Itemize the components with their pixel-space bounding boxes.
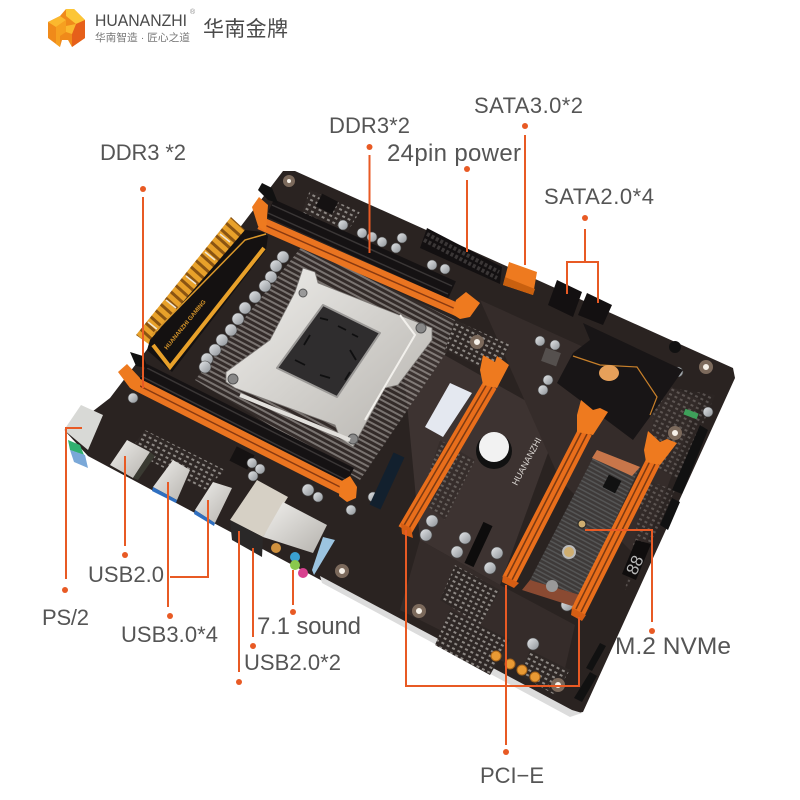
upper DDR3 slots <box>252 183 480 319</box>
icon: orange cube logo <box>48 9 85 47</box>
brand name Chinese: 华南金牌 <box>203 18 288 41</box>
pointer <box>366 144 372 253</box>
digit display: 88 <box>622 553 648 578</box>
audio block <box>263 502 335 578</box>
pointer <box>522 123 528 265</box>
CPU socket <box>226 268 432 447</box>
chipset heatsink <box>557 323 683 440</box>
annotation: USB2.0 dual <box>236 531 341 685</box>
annotation: DDR3 upper <box>329 113 410 253</box>
USB 3.0 port B <box>194 482 232 526</box>
USB 2.0 port <box>110 440 155 480</box>
PS/2 port <box>64 405 103 468</box>
annotation: 7.1 sound <box>257 570 361 640</box>
annotation: PS/2 <box>42 428 89 630</box>
pointer <box>464 166 470 252</box>
pointer <box>567 215 598 303</box>
board PCB <box>66 171 735 717</box>
black PCIe x4 slots <box>375 455 488 565</box>
brand name: HUANANZHI <box>95 12 187 30</box>
24pin power connector <box>420 228 502 284</box>
RJ45 port <box>230 480 288 557</box>
lower DDR3 slots <box>118 352 357 502</box>
annotation: DDR3 left <box>100 140 186 388</box>
annotation: USB2.0 <box>88 456 164 587</box>
label: DDR3 *2 <box>100 140 186 165</box>
pointer <box>140 186 146 388</box>
inductor and green header <box>541 348 699 419</box>
rear IO ports <box>64 405 335 578</box>
circuit patches <box>130 190 715 695</box>
CMOS battery <box>476 432 512 469</box>
digit display <box>622 540 651 580</box>
PCI-E slot 2 <box>502 400 608 588</box>
mounting holes <box>285 177 711 690</box>
label: SATA2.0*4 <box>544 184 654 209</box>
label: SATA3.0*2 <box>474 93 583 118</box>
annotation: PCI-E <box>406 530 579 788</box>
label: PS/2 <box>42 605 89 630</box>
audio capacitors <box>491 651 540 682</box>
motherboard <box>64 171 735 717</box>
label: DDR3*2 <box>329 113 410 138</box>
SATA2 connectors <box>548 280 612 325</box>
socket traces <box>195 245 465 480</box>
registered mark: ® <box>190 8 196 16</box>
label: 7.1 sound <box>257 613 361 640</box>
annotation: SATA2 <box>544 184 654 303</box>
label: PCI−E <box>480 763 544 788</box>
pointer <box>62 428 82 593</box>
capacitors <box>128 220 713 650</box>
annotation: M.2 NVMe <box>585 530 731 660</box>
label: 24pin power <box>387 140 521 167</box>
RAM module <box>136 217 268 372</box>
PCI-E slots <box>401 355 677 621</box>
label: USB2.0 <box>88 562 164 587</box>
RAM module: HUANANZHI GAMING <box>164 299 208 351</box>
annotation: USB3.0 <box>121 482 218 647</box>
VRM capacitors <box>199 251 289 373</box>
label: USB2.0*2 <box>244 650 341 675</box>
pointer <box>167 482 208 619</box>
logo <box>48 8 288 47</box>
sticker <box>425 383 472 437</box>
label: M.2 NVMe <box>615 633 731 660</box>
M.2 slot area <box>522 450 640 606</box>
pointer <box>236 531 256 685</box>
pointer <box>290 570 296 615</box>
annotation: 24pin power <box>387 140 521 252</box>
brand slogan: 华南智造 · 匠心之道 <box>95 31 190 44</box>
USB 3.0 port A <box>152 460 190 503</box>
annotation: SATA3 <box>474 93 583 265</box>
pointer <box>406 530 579 755</box>
PCI-E slot 3 <box>571 431 677 621</box>
board brand text: HUANANZHI <box>510 436 543 487</box>
pointer <box>585 530 655 634</box>
SATA3 connector <box>503 262 537 295</box>
label: USB3.0*4 <box>121 622 218 647</box>
pointer <box>122 456 128 558</box>
pin headers <box>574 425 708 702</box>
PCI-E slot 1 <box>401 355 509 538</box>
